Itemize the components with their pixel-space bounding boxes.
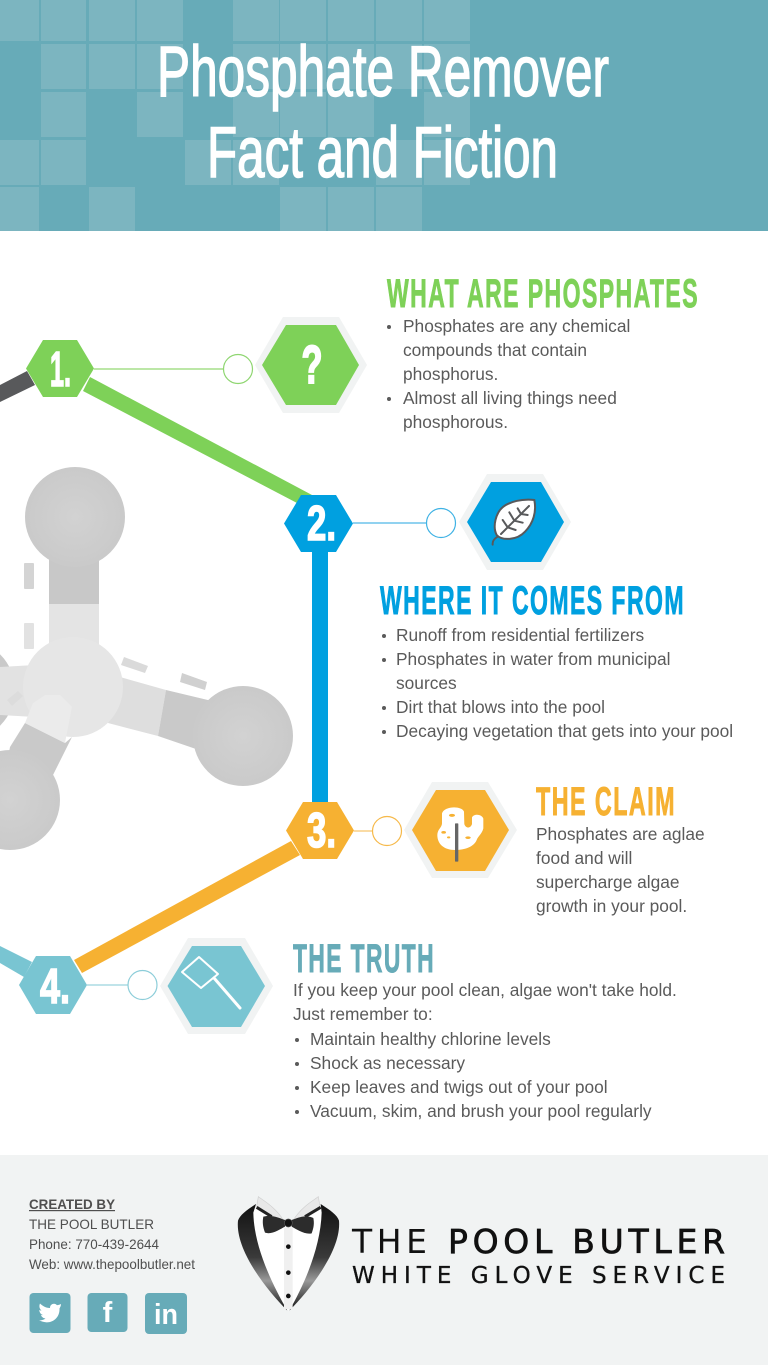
section: the claim: growth in your pool. bbox=[536, 896, 687, 916]
icon: sponge bbox=[404, 782, 517, 878]
section: where it comes from: Runoff from residential fertilizers bbox=[396, 625, 644, 645]
section: the truth: Shock as necessary bbox=[310, 1053, 465, 1073]
step 3 marker bbox=[286, 802, 402, 859]
section: what are phosphates bbox=[387, 272, 699, 432]
section: where it comes from: Phosphates in water from municipal bbox=[396, 649, 670, 669]
connector bars bbox=[0, 371, 328, 977]
icon: linkedin bbox=[145, 1293, 187, 1334]
section: the truth: THE TRUTH bbox=[293, 937, 435, 981]
section: the claim bbox=[536, 780, 705, 916]
logo: wordmark: WHITE GLOVE SERVICE bbox=[352, 1263, 725, 1289]
step 2 marker bbox=[284, 495, 456, 552]
section: where it comes from: Dirt that blows into the pool bbox=[396, 697, 605, 717]
section: the truth: If you keep your pool clean, algae won't take hold. bbox=[293, 980, 677, 1000]
logo: wordmark bbox=[351, 1222, 725, 1289]
footer credits: Phone: 770-439-2644 bbox=[29, 1237, 159, 1252]
icon: question mark bbox=[255, 317, 367, 413]
icon: facebook: f bbox=[103, 1297, 113, 1329]
icon: leaf bbox=[459, 474, 571, 570]
footer credits: Web: www.thepoolbutler.net bbox=[29, 1257, 195, 1272]
step 3 marker: 3. bbox=[307, 804, 336, 858]
logo: wordmark: POOL BUTLER bbox=[448, 1222, 725, 1261]
section: what are phosphates: Almost all living things need bbox=[403, 388, 617, 408]
step 2 marker: 2. bbox=[307, 497, 336, 551]
section: the truth bbox=[293, 937, 677, 1121]
section: what are phosphates: phosphorous. bbox=[403, 412, 508, 432]
section: the truth: Vacuum, skim, and brush your pool regularly bbox=[310, 1101, 652, 1121]
icon: twitter bbox=[30, 1293, 70, 1333]
icon: pool skimmer bbox=[160, 938, 273, 1034]
footer panel bbox=[0, 1155, 768, 1365]
section: the truth: Keep leaves and twigs out of your pool bbox=[310, 1077, 608, 1097]
header banner bbox=[0, 0, 768, 231]
section: where it comes from bbox=[380, 579, 733, 741]
footer credits: CREATED BY bbox=[29, 1197, 115, 1212]
section: the claim: food and will bbox=[536, 848, 632, 868]
icon: question mark: ? bbox=[302, 335, 322, 395]
section: where it comes from: Decaying vegetation that gets into your pool bbox=[396, 721, 733, 741]
title bbox=[157, 33, 609, 193]
icon: facebook bbox=[88, 1293, 128, 1332]
footer credits bbox=[29, 1197, 195, 1272]
section: the claim: supercharge algae bbox=[536, 872, 680, 892]
step 4 marker: 4. bbox=[40, 960, 70, 1014]
section: what are phosphates: Phosphates are any chemical bbox=[403, 316, 630, 336]
icon: linkedin: in bbox=[154, 1299, 178, 1331]
step 1 marker: 1. bbox=[50, 343, 71, 397]
title: Fact and Fiction bbox=[207, 114, 558, 193]
footer credits: THE POOL BUTLER bbox=[29, 1217, 154, 1232]
section: the truth: Maintain healthy chlorine levels bbox=[310, 1029, 551, 1049]
section: what are phosphates: phosphorus. bbox=[403, 364, 498, 384]
logo: tuxedo bbox=[238, 1197, 339, 1311]
section: the truth: Just remember to: bbox=[293, 1004, 433, 1024]
logo: wordmark: THE bbox=[351, 1222, 427, 1261]
molecule illustration bbox=[0, 467, 293, 850]
section: the claim: Phosphates are aglae bbox=[536, 824, 705, 844]
step 1 marker bbox=[26, 340, 252, 397]
section: what are phosphates: compounds that contain bbox=[403, 340, 587, 360]
step 4 marker bbox=[19, 956, 157, 1014]
section: where it comes from: sources bbox=[396, 673, 457, 693]
